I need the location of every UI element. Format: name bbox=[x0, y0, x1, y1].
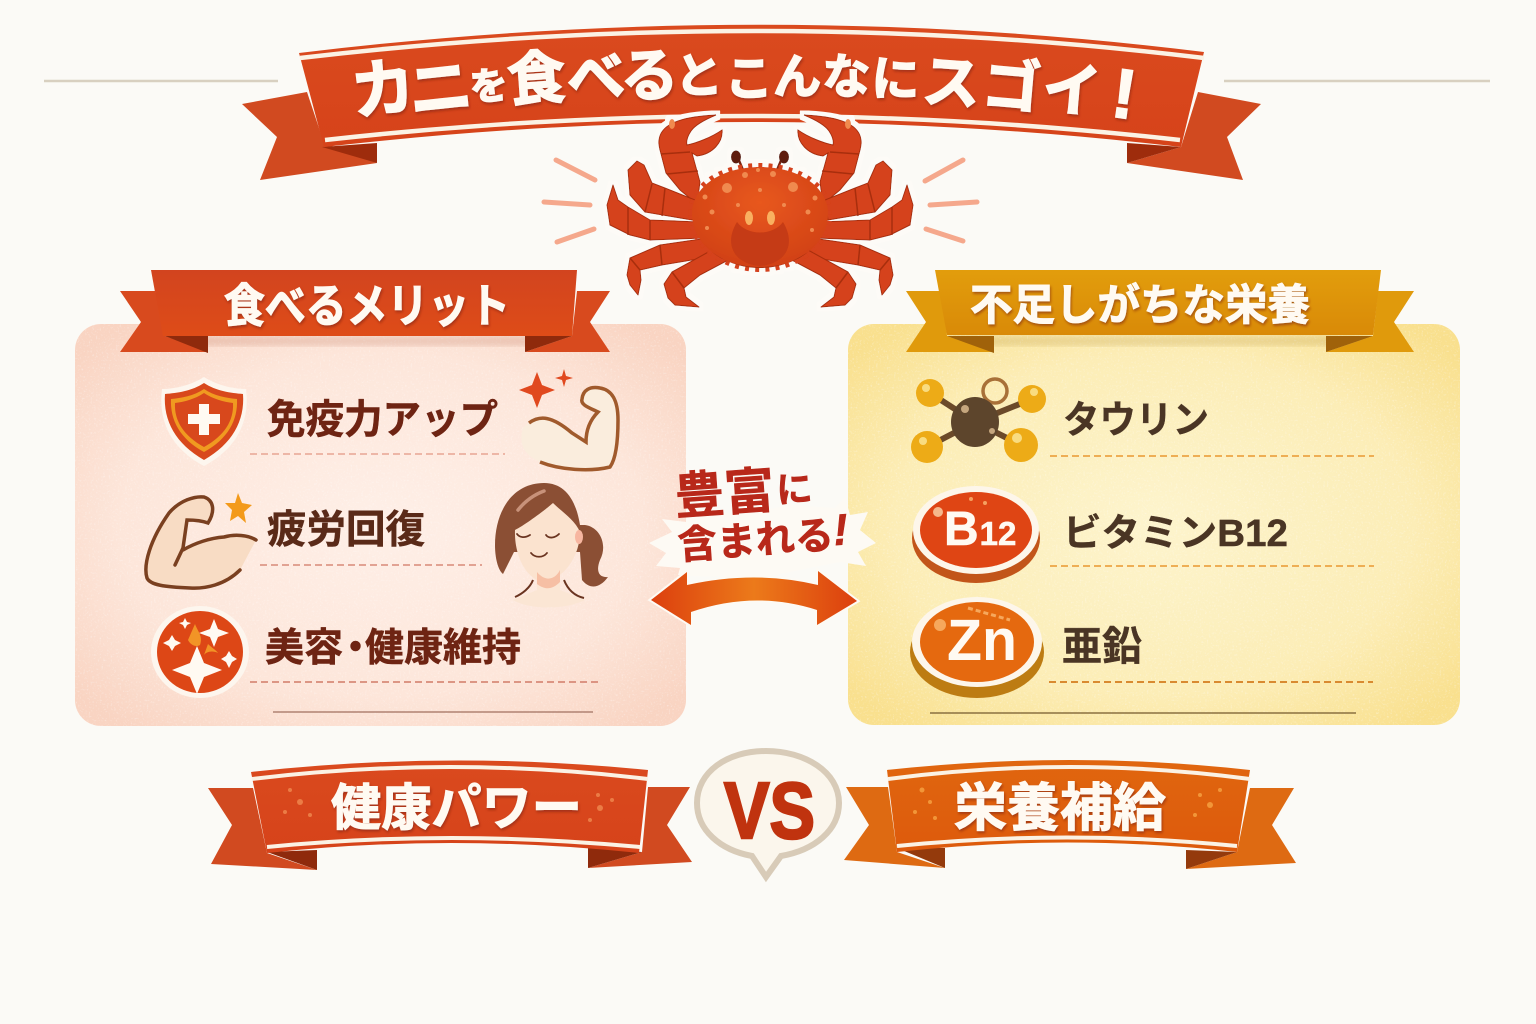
row: beauty bbox=[151, 606, 600, 698]
title text: スゴイ bbox=[920, 49, 1103, 126]
callout text: 含まれる bbox=[677, 514, 835, 568]
row: zinc bbox=[910, 597, 1373, 698]
VS speech bubble: VS bbox=[724, 766, 815, 855]
ribbon: nutrition supply: 栄養補給 bbox=[954, 780, 1166, 838]
label: 疲労回復 bbox=[267, 509, 425, 552]
callout: rich in bbox=[649, 457, 876, 578]
icon: Zn badge: Zn bbox=[947, 608, 1017, 673]
label: 亜鉛 bbox=[1062, 625, 1142, 669]
crab illustration bbox=[607, 115, 913, 307]
callout text: に bbox=[775, 468, 814, 511]
panel heading ribbon: 食べるメリット bbox=[224, 280, 510, 332]
icon: sparkle badge bbox=[151, 606, 249, 698]
icon: shield bbox=[161, 377, 247, 466]
icon: molecule bbox=[911, 379, 1046, 463]
icon: B12 badge: B12 bbox=[944, 503, 1016, 556]
label: タウリン bbox=[1063, 400, 1209, 442]
label: 免疫力アップ bbox=[267, 398, 498, 442]
row: vitamin b12 bbox=[912, 486, 1374, 583]
label: 健康維持 bbox=[365, 627, 521, 670]
title text: 食べる bbox=[505, 43, 679, 114]
row: fatigue bbox=[146, 483, 608, 608]
title text: ! bbox=[1107, 54, 1141, 134]
icon: flexed arm with sparkles bbox=[519, 369, 618, 470]
title text: とこんなに bbox=[674, 50, 920, 108]
ribbon: nutrition supply bbox=[844, 760, 1296, 869]
crab eyes bbox=[731, 150, 789, 170]
icon: flexed arm with star bbox=[146, 493, 256, 588]
title text: カニ bbox=[347, 50, 476, 129]
arrow: double-headed bbox=[651, 571, 857, 625]
panel heading ribbon bbox=[906, 270, 1414, 353]
panel heading ribbon bbox=[120, 270, 610, 353]
callout text: 豊富 bbox=[673, 462, 776, 525]
label: ・ bbox=[336, 627, 375, 670]
crab shell bbox=[692, 167, 828, 268]
ribbon: health power bbox=[208, 760, 692, 870]
icon: B12 badge bbox=[912, 486, 1040, 583]
crab emphasis rays bbox=[544, 160, 977, 242]
banner body bbox=[299, 25, 1204, 147]
icon: woman with closed eyes bbox=[495, 483, 608, 608]
icon: Zn badge bbox=[910, 597, 1044, 698]
panel: benefits bbox=[75, 270, 686, 726]
title text: を bbox=[468, 65, 510, 110]
banner tails bbox=[242, 92, 1261, 180]
panel heading ribbon: 不足しがちな栄養 bbox=[970, 282, 1310, 330]
row: taurine bbox=[911, 379, 1374, 463]
panel: nutrients bbox=[848, 270, 1460, 725]
ribbon: health power: 健康パワー bbox=[331, 780, 582, 836]
VS speech bubble bbox=[697, 751, 839, 877]
label: ビタミンB12 bbox=[1063, 513, 1288, 555]
main title banner bbox=[242, 25, 1261, 180]
label: 美容 bbox=[265, 627, 343, 670]
burst background bbox=[649, 497, 876, 578]
callout text: ! bbox=[832, 505, 850, 555]
crab legs and claws bbox=[607, 115, 913, 307]
row: immune bbox=[161, 369, 618, 470]
